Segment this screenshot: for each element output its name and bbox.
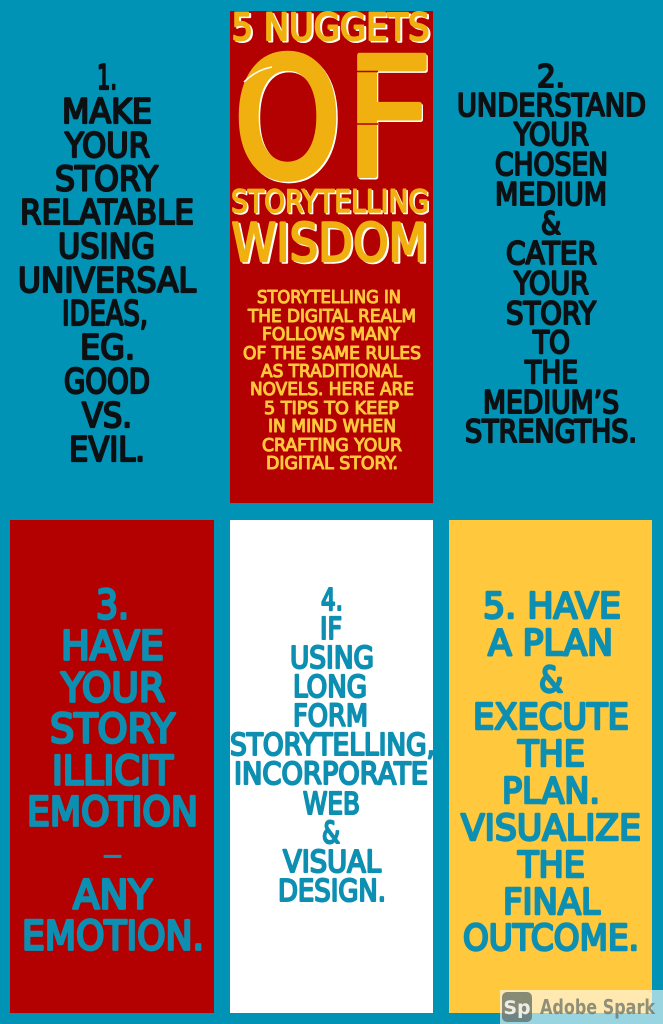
heading: OF: F [346, 24, 434, 216]
panel: tip 2 text: 2. [537, 59, 565, 95]
intro paragraph: DIGITAL STORY. [266, 454, 398, 474]
panel: tip 3 [10, 520, 214, 1013]
panel: tip 4: LONG [293, 670, 367, 705]
panel: tip 1 text: MAKE [62, 92, 152, 132]
intro paragraph: FOLLOWS MANY [262, 325, 400, 345]
panel: tip 2 text: MEDIUM’S [483, 385, 619, 421]
intro paragraph: IN MIND WHEN [268, 417, 396, 437]
panel: tip 5: PLAN. [502, 771, 600, 812]
panel: tip 5: & [539, 660, 563, 701]
panel: tip 4: INCORPORATE [234, 757, 428, 792]
panel: tip 3: HAVE [61, 624, 164, 670]
panel: tip 5: A PLAN [488, 623, 613, 664]
panel: tip 3: YOUR [60, 666, 165, 712]
panel: tip 3: EMOTION [27, 790, 198, 836]
heading: OF [234, 22, 434, 216]
panel: tip 1 text: RELATABLE [20, 193, 194, 233]
panel: tip 3: EMOTION. [22, 914, 204, 960]
intro paragraph [243, 288, 421, 474]
heading: storytelling: STORYTELLING [232, 186, 430, 222]
panel: tip 1 text: STORY [55, 160, 158, 200]
panel: tip 5: VISUALIZE [461, 808, 641, 849]
panel: tip 3: ILLICIT [52, 749, 174, 795]
intro paragraph: STORYTELLING IN [257, 288, 401, 308]
panel: tip 2 text: YOUR [513, 117, 589, 153]
watermark: Adobe Spark [500, 990, 663, 1024]
panel: tip 5: EXECUTE [473, 697, 629, 738]
panel: tip 3: STORY [50, 707, 176, 753]
panel: tip 1 text: IDEAS, [62, 294, 148, 334]
heading: OF: F [344, 22, 433, 214]
panel: tip 2 text: THE [524, 355, 578, 391]
panel: tip 2 text: MEDIUM [495, 177, 607, 213]
panel: tip 4: WEB [303, 787, 360, 822]
panel: tip 5: THE [517, 734, 585, 775]
intro paragraph: THE DIGITAL REALM [247, 307, 416, 327]
intro paragraph: AS TRADITIONAL [261, 362, 402, 382]
panel: tip 4: USING [290, 641, 374, 676]
intro paragraph: OF THE SAME RULES [243, 344, 421, 364]
heading: 5 nuggets: 5 NUGGETS [234, 8, 432, 50]
panel: tip 5 [449, 520, 652, 1013]
intro paragraph: CRAFTING YOUR [262, 436, 402, 456]
panel: tip 4: DESIGN. [278, 874, 386, 909]
panel: tip 2 text: STORY [506, 296, 597, 332]
heading: wisdom: WISDOM [234, 214, 430, 276]
icon: Sp logo: Sp [503, 997, 531, 1019]
panel: tip 1 text [18, 58, 196, 470]
panel: tip 4: VISUAL [283, 845, 381, 880]
panel: title card [230, 6, 434, 503]
panel: tip 3: — [103, 838, 122, 873]
panel: tip 1 text: 1. [97, 58, 117, 98]
panel: tip 3: ANY [73, 873, 153, 919]
panel: tip 2 text: & [541, 206, 561, 242]
panel: tip 1 text: GOOD [64, 362, 150, 402]
heading: storytelling: STORYTELLING [231, 184, 429, 220]
panel: tip 4: 4. [321, 583, 343, 618]
panel: tip 2 text: STRENGTHS. [465, 414, 637, 450]
heading: wisdom: WISDOM [232, 213, 428, 274]
panel: tip 2 text: YOUR [513, 266, 589, 302]
panel: tip 1 text: UNIVERSAL [18, 261, 196, 301]
panel: tip 5: OUTCOME. [463, 918, 639, 959]
intro paragraph: NOVELS. HERE ARE [250, 380, 414, 400]
panel: tip 2 text: TO [532, 325, 570, 361]
icon: Sp logo [502, 992, 532, 1022]
panel: tip 3: 3. [96, 583, 129, 629]
panel: tip 1 text: VS. [82, 396, 132, 436]
panel: tip 1 text: EG. [80, 328, 135, 368]
panel: tip 2 text: CHOSEN [495, 147, 608, 183]
panel: tip 4 [230, 520, 435, 1013]
panel: tip 4: & [322, 816, 340, 851]
panel: tip 5: 5. HAVE [483, 586, 621, 627]
panel: tip 5: THE [517, 845, 585, 886]
panel: tip 4: IF [320, 612, 342, 647]
panel: tip 1 text: YOUR [64, 126, 150, 166]
panel: tip 4: FORM [293, 699, 368, 734]
intro paragraph: 5 TIPS TO KEEP [264, 399, 399, 419]
panel: tip 2 text [457, 59, 646, 450]
panel: tip 4: STORYTELLING, [230, 728, 435, 763]
panel: tip 5: FINAL [503, 882, 600, 923]
heading: OF: O [234, 24, 341, 215]
heading: OF: O [236, 26, 342, 216]
panel: tip 1 text: EVIL. [69, 430, 145, 470]
panel: tip 2 text: CATER [506, 236, 597, 272]
heading: 5 nuggets: 5 NUGGETS [232, 6, 430, 49]
panel: tip 1 text: USING [58, 227, 155, 267]
